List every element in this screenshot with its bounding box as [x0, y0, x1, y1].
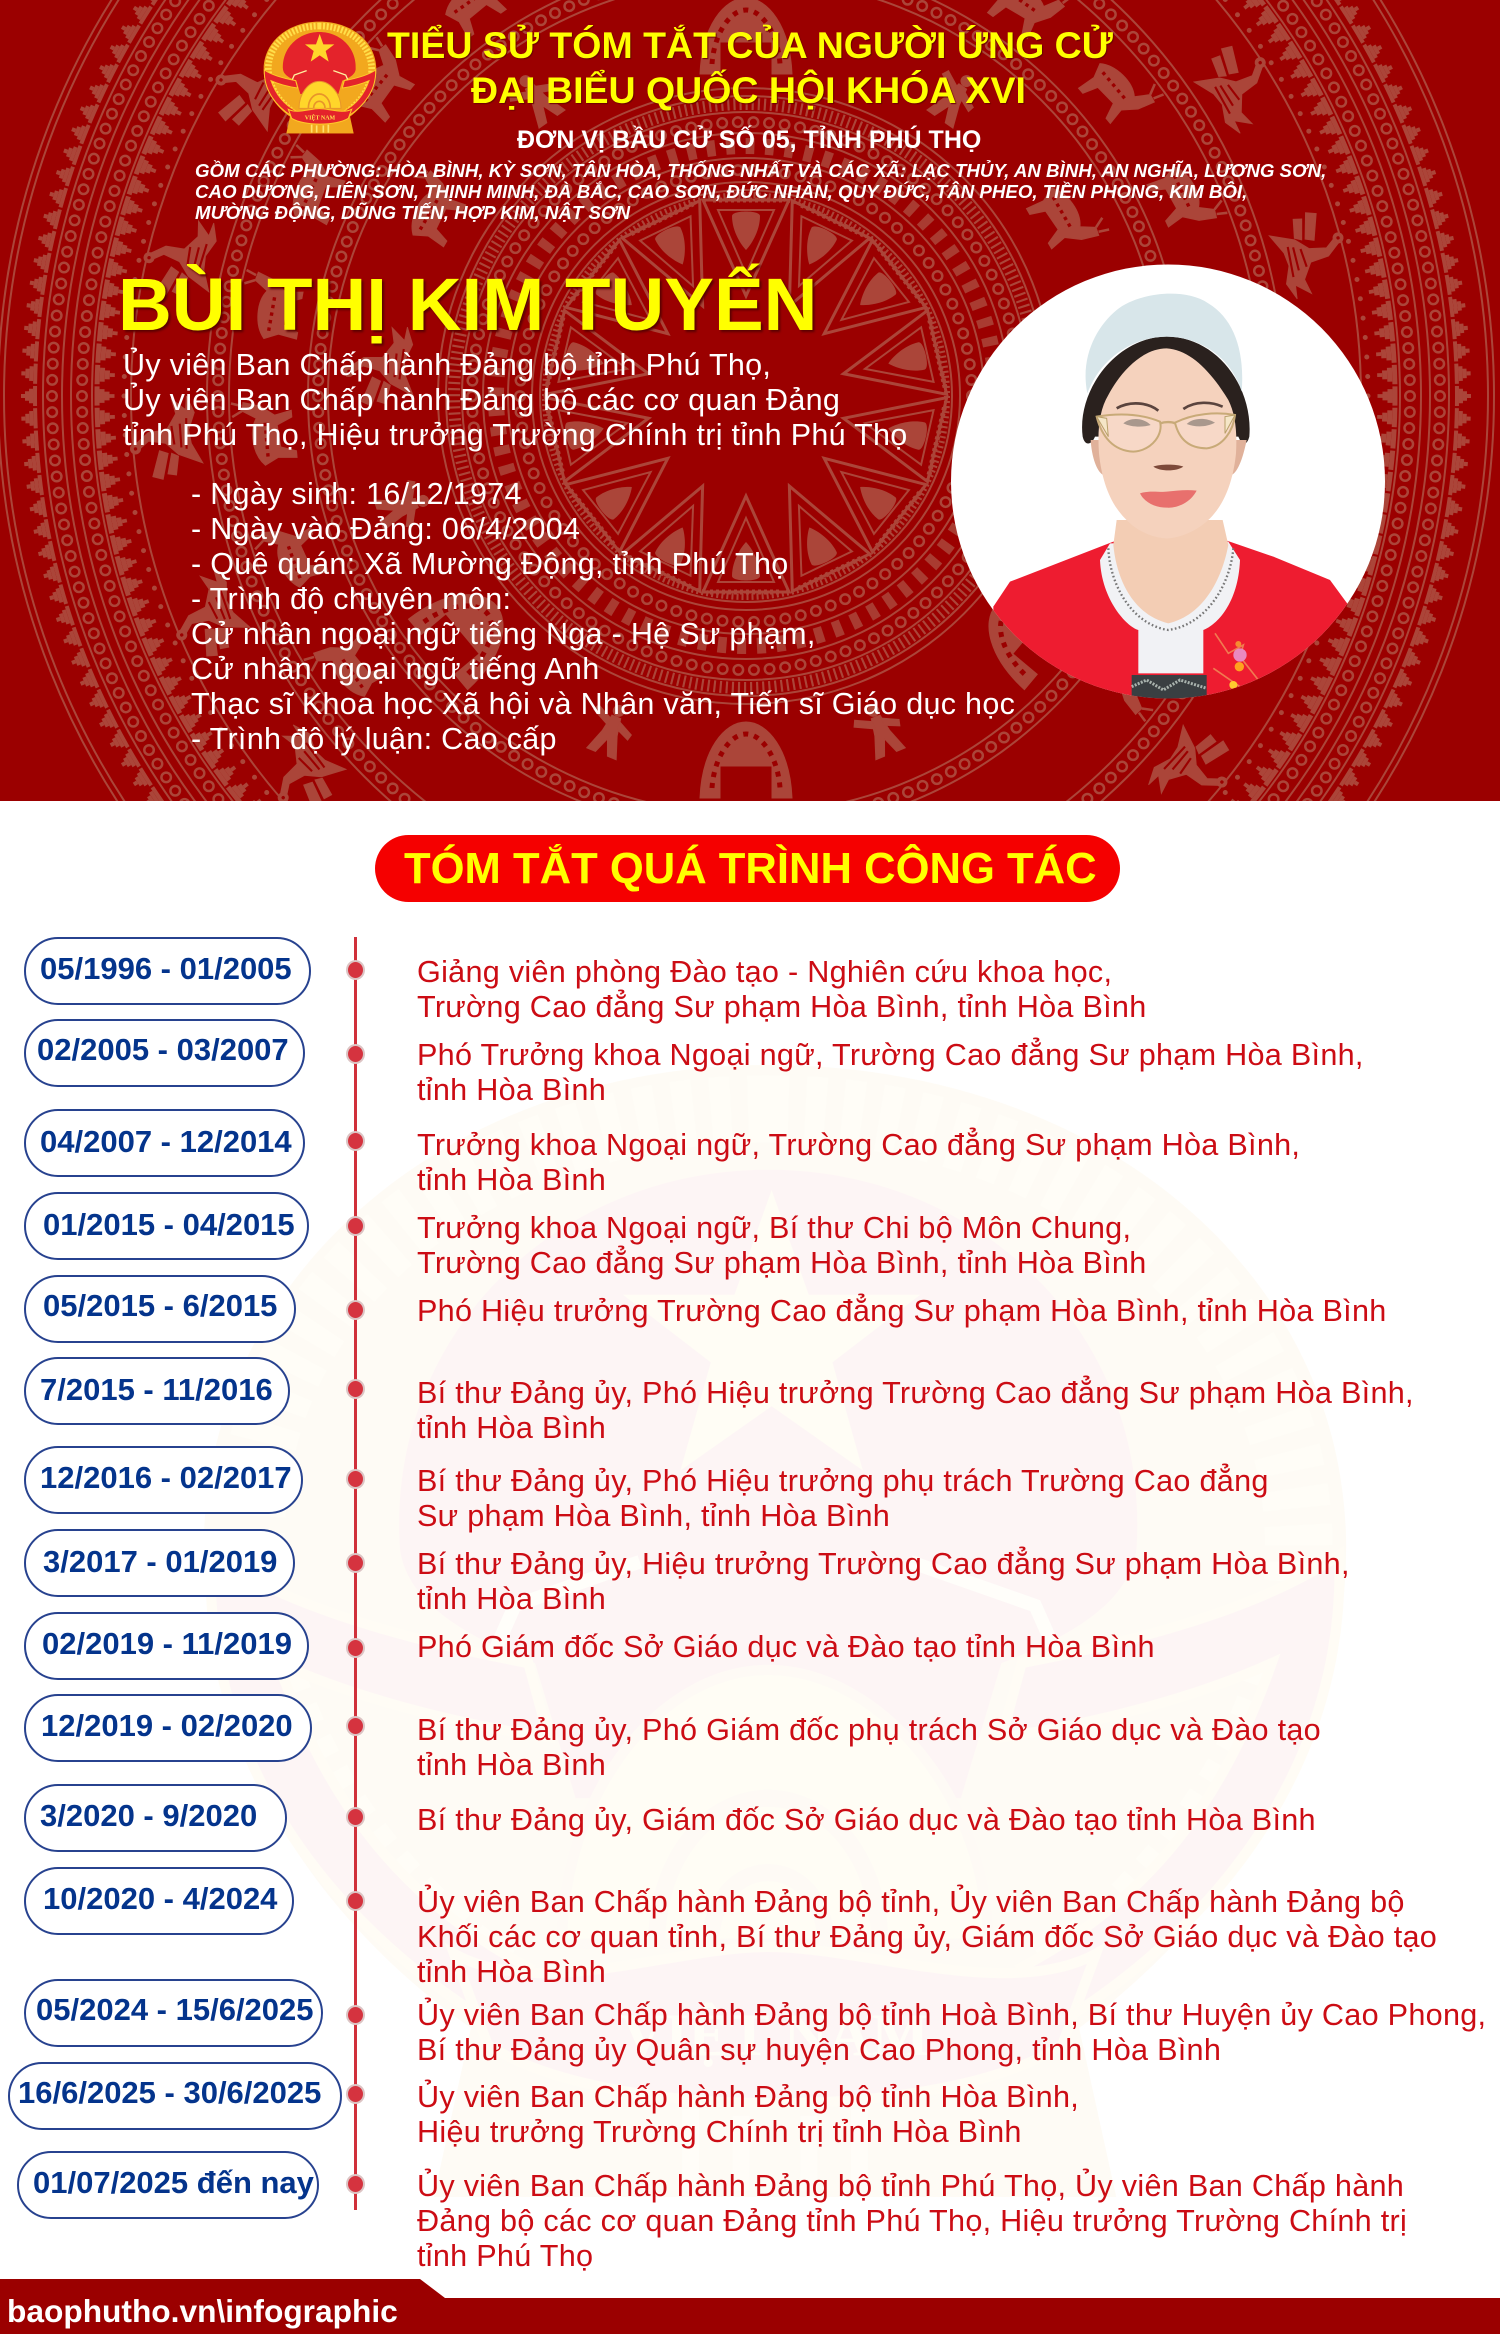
description: Ủy viên Ban Chấp hành Đảng bộ tỉnh Phú Thọ, Ủy viên Ban Chấp hành [417, 2169, 1404, 2203]
list of wards and communes: GỒM CÁC PHƯỜNG: HÒA BÌNH, KỲ SƠN, TÂN HÒA, THỐNG NHẤT VÀ CÁC XÃ: LẠC THỦY, AN BÌNH, AN NGHĨA, LƯƠNG SƠN, [195, 160, 1326, 181]
description [417, 1713, 1321, 1782]
marker [346, 1553, 365, 1573]
date: 02/2005 - 03/2007 [37, 1032, 289, 1067]
candidate personal details: Cử nhân ngoại ngữ tiếng Anh [191, 652, 599, 686]
candidate positions: Ủy viên Ban Chấp hành Đảng bộ các cơ quan Đảng [123, 383, 840, 417]
description: Ủy viên Ban Chấp hành Đảng bộ tỉnh Hòa Bình, [417, 2080, 1079, 2114]
date: 02/2019 - 11/2019 [42, 1626, 292, 1661]
panel: red header banner [0, 0, 1500, 801]
description: Trưởng khoa Ngoại ngữ, Bí thư Chi bộ Môn Chung, [417, 1211, 1131, 1245]
description: tỉnh Hòa Bình [417, 1163, 606, 1197]
date: 16/6/2025 - 30/6/2025 [18, 2075, 321, 2110]
timeline entry 15 [17, 2151, 1407, 2273]
description: Phó Trưởng khoa Ngoại ngữ, Trường Cao đẳng Sư phạm Hòa Bình, [417, 1038, 1364, 1072]
timeline entry 9 [24, 1612, 1155, 1680]
description: Giảng viên phòng Đào tạo - Nghiên cứu khoa học, [417, 955, 1112, 989]
icon: national emblem: VIỆT NAM [305, 113, 336, 121]
candidate positions: Ủy viên Ban Chấp hành Đảng bộ tỉnh Phú Thọ, [123, 348, 771, 382]
description: Hiệu trưởng Trường Chính trị tỉnh Hòa Bình [417, 2115, 1022, 2149]
description [417, 1546, 1350, 1616]
date pill [17, 2151, 319, 2219]
marker [346, 1131, 365, 1151]
date: 05/2015 - 6/2015 [43, 1288, 277, 1323]
description [417, 955, 1147, 1024]
timeline entry 3 [24, 1109, 1300, 1197]
marker [346, 1379, 365, 1399]
description: Sư phạm Hòa Bình, tỉnh Hòa Bình [417, 1499, 890, 1533]
footer shape [0, 2279, 1500, 2334]
description [417, 1211, 1147, 1280]
description: Bí thư Đảng ủy, Phó Hiệu trưởng phụ trách Trường Cao đẳng [417, 1464, 1269, 1498]
date pill [8, 2062, 342, 2130]
date: 01/07/2025 đến nay [33, 2165, 314, 2200]
candidate personal details [191, 477, 1015, 756]
candidate personal details: Cử nhân ngoại ngữ tiếng Nga - Hệ Sư phạm, [191, 617, 816, 651]
timeline entry 13 [24, 1979, 1486, 2067]
date pill [24, 1694, 312, 1762]
description [417, 1464, 1269, 1533]
description [417, 1128, 1300, 1197]
description: Bí thư Đảng ủy, Hiệu trưởng Trường Cao đẳng Sư phạm Hòa Bình, [417, 1547, 1350, 1581]
footer bar [0, 2279, 1500, 2334]
description: Trưởng khoa Ngoại ngữ, Trường Cao đẳng Sư phạm Hòa Bình, [417, 1128, 1300, 1162]
date: 05/1996 - 01/2005 [40, 951, 292, 986]
description: Bí thư Đảng ủy, Giám đốc Sở Giáo dục và Đào tạo tỉnh Hòa Bình [417, 1803, 1316, 1837]
timeline entry 11 [24, 1784, 1316, 1852]
description: Phó Giám đốc Sở Giáo dục và Đào tạo tỉnh Hòa Bình [417, 1630, 1155, 1664]
timeline entry 7 [24, 1446, 1269, 1533]
description [417, 1998, 1486, 2067]
timeline entry 2 [24, 1019, 1364, 1107]
date pill [24, 1979, 323, 2047]
timeline entry 12 [24, 1867, 1437, 1989]
timeline vertical line [354, 937, 357, 2210]
description: Ủy viên Ban Chấp hành Đảng bộ tỉnh, Ủy viên Ban Chấp hành Đảng bộ [417, 1885, 1405, 1919]
section heading text: TÓM TẮT QUÁ TRÌNH CÔNG TÁC [404, 845, 1097, 893]
date pill [24, 1529, 295, 1597]
description: Khối các cơ quan tỉnh, Bí thư Đảng ủy, Giám đốc Sở Giáo dục và Đào tạo [417, 1920, 1437, 1954]
section heading pill [375, 835, 1120, 902]
marker [346, 1891, 365, 1911]
date: 04/2007 - 12/2014 [40, 1124, 292, 1159]
list of wards and communes [195, 160, 1326, 223]
background: Dong Son drum pattern [0, 0, 1495, 801]
date: 12/2019 - 02/2020 [41, 1708, 293, 1743]
icon: national emblem [264, 22, 376, 134]
marker [346, 1469, 365, 1489]
description: Bí thư Đảng ủy, Phó Giám đốc phụ trách Sở Giáo dục và Đào tạo [417, 1713, 1321, 1747]
description: tỉnh Phú Thọ [417, 2239, 593, 2273]
date pill [24, 1446, 303, 1514]
portrait photo [951, 264, 1385, 698]
timeline entry 4 [24, 1192, 1147, 1280]
description: Ủy viên Ban Chấp hành Đảng bộ tỉnh Hoà Bình, Bí thư Huyện ủy Cao Phong, [417, 1998, 1486, 2032]
candidate personal details: - Trình độ lý luận: Cao cấp [191, 722, 557, 756]
marker [346, 2084, 365, 2104]
date: 3/2017 - 01/2019 [43, 1544, 277, 1579]
marker [346, 2005, 365, 2025]
description: Phó Hiệu trưởng Trường Cao đẳng Sư phạm Hòa Bình, tỉnh Hòa Bình [417, 1294, 1387, 1328]
date pill [24, 1867, 294, 1935]
description: tỉnh Hòa Bình [417, 1073, 606, 1107]
description [417, 1376, 1414, 1445]
date pill [24, 1784, 287, 1852]
candidate personal details: - Ngày sinh: 16/12/1974 [191, 477, 522, 511]
description: tỉnh Hòa Bình [417, 1411, 606, 1445]
candidate positions: tỉnh Phú Thọ, Hiệu trưởng Trường Chính trị tỉnh Phú Thọ [123, 418, 908, 452]
timeline entry 5 [24, 1275, 1387, 1343]
marker [346, 1716, 365, 1736]
date: 01/2015 - 04/2015 [43, 1207, 295, 1242]
watermark: pale national emblem [204, 1065, 1346, 2197]
list of wards and communes: MƯỜNG ĐỘNG, DŨNG TIẾN, HỢP KIM, NẬT SƠN [195, 202, 630, 223]
date: 3/2020 - 9/2020 [40, 1798, 257, 1833]
constituency heading: ĐƠN VỊ BẦU CỬ SỐ 05, TỈNH PHÚ THỌ [517, 126, 981, 154]
timeline entry 1 [24, 937, 1147, 1024]
footer source text: baophutho.vn\infographic [7, 2293, 398, 2329]
candidate personal details: - Ngày vào Đảng: 06/4/2004 [191, 512, 580, 546]
date pill [24, 1019, 305, 1087]
date: 12/2016 - 02/2017 [40, 1460, 292, 1495]
marker [346, 2174, 365, 2194]
candidate personal details: Thạc sĩ Khoa học Xã hội và Nhân văn, Tiến sĩ Giáo dục học [191, 687, 1015, 721]
marker [346, 1300, 365, 1320]
description: Trường Cao đẳng Sư phạm Hòa Bình, tỉnh Hòa Bình [417, 1246, 1147, 1280]
marker [346, 1807, 365, 1827]
title [387, 24, 1114, 112]
marker [346, 960, 365, 980]
date pill [24, 1192, 309, 1260]
description: tỉnh Hòa Bình [417, 1582, 606, 1616]
date pill [24, 1109, 305, 1177]
candidate name: BÙI THỊ KIM TUYẾN [118, 263, 817, 346]
description [417, 2168, 1407, 2273]
timeline entry 14 [8, 2062, 1079, 2149]
description: Trường Cao đẳng Sư phạm Hòa Bình, tỉnh Hòa Bình [417, 990, 1147, 1024]
candidate personal details: - Trình độ chuyên môn: [191, 582, 511, 616]
description: Đảng bộ các cơ quan Đảng tỉnh Phú Thọ, Hiệu trưởng Trường Chính trị [417, 2204, 1407, 2238]
marker [346, 1216, 365, 1236]
timeline entry 6 [24, 1357, 1414, 1445]
date: 05/2024 - 15/6/2025 [36, 1992, 314, 2027]
title line 2: ĐẠI BIỂU QUỐC HỘI KHÓA XVI [471, 69, 1026, 111]
description [417, 2080, 1079, 2149]
candidate positions [123, 348, 908, 452]
date: 7/2015 - 11/2016 [40, 1372, 273, 1407]
description: Bí thư Đảng ủy, Phó Hiệu trưởng Trường Cao đẳng Sư phạm Hòa Bình, [417, 1376, 1414, 1410]
timeline entry 8 [24, 1529, 1350, 1616]
marker [346, 1044, 365, 1064]
date pill [24, 1357, 290, 1425]
date pill [24, 937, 311, 1005]
title line 1: TIỂU SỬ TÓM TẮT CỦA NGƯỜI ỨNG CỬ [387, 24, 1113, 66]
candidate personal details: - Quê quán: Xã Mường Động, tỉnh Phú Thọ [191, 547, 789, 581]
list of wards and communes: CAO DƯƠNG, LIÊN SƠN, THỊNH MINH, ĐÀ BẮC, CAO SƠN, ĐỨC NHÀN, QUY ĐỨC, TÂN PHEO, TIỀN PHONG, KIM BÔI, [195, 181, 1247, 202]
description [417, 1038, 1364, 1107]
marker [346, 1638, 365, 1658]
timeline entry 10 [24, 1694, 1321, 1782]
description: tỉnh Hòa Bình [417, 1748, 606, 1782]
date pill [24, 1275, 296, 1343]
date pill [24, 1612, 309, 1680]
description [417, 1884, 1437, 1989]
description: tỉnh Hòa Bình [417, 1955, 606, 1989]
date: 10/2020 - 4/2024 [43, 1881, 277, 1916]
description: Bí thư Đảng ủy Quân sự huyện Cao Phong, tỉnh Hòa Bình [417, 2033, 1221, 2067]
